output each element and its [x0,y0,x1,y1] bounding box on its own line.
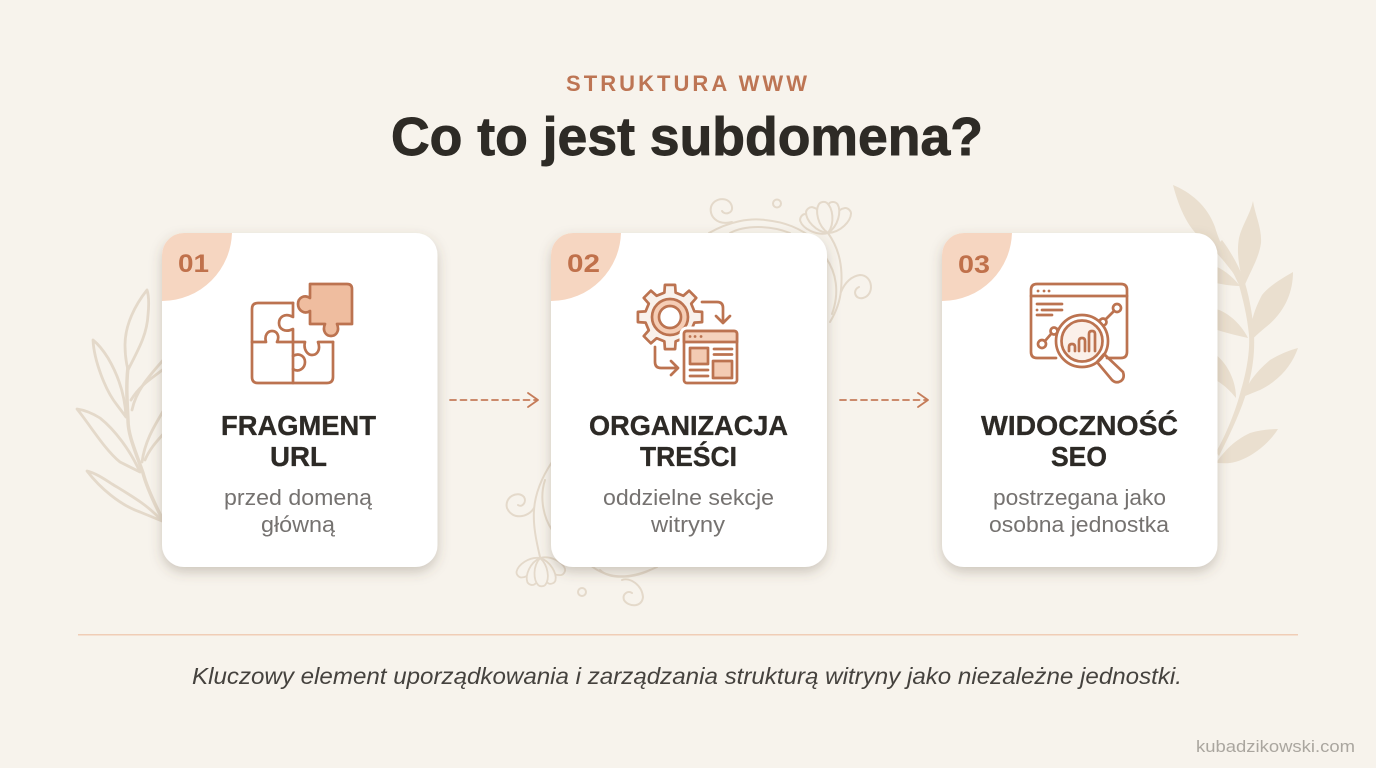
closing statement: Kluczowy element uporządkowania i zarządzania strukturą witryny jako niezależne jednostki. [192,663,1182,689]
card 2 description: oddzielne sekcje [603,485,774,510]
card 3 heading: SEO [1051,441,1107,472]
card 1 [156,232,444,578]
card 2 description [603,485,774,537]
decoration: swirl bottom left [507,462,657,605]
card 2 heading: ORGANIZACJA [589,410,788,441]
card 3 number badge [942,233,1012,301]
card 3 description [989,485,1170,537]
card 1 heading: FRAGMENT [221,410,376,441]
title: Co to jest subdomena? [391,107,983,167]
card 2 number badge [551,233,621,301]
card 2 description: witryny [650,512,725,537]
card 2 heading: TREŚCI [640,441,737,472]
card 2 heading [589,410,788,472]
card 3 [936,232,1224,578]
card 1 heading: URL [270,441,327,472]
card 2 number badge: 02 [567,250,600,278]
divider [78,634,1298,636]
card 1 description: główną [261,512,336,537]
card 2 [544,232,834,578]
icon: browser window with magnifier [1031,284,1127,382]
arrow 2 to 3 [840,393,928,407]
icon: gear and window [638,285,737,383]
decoration: filled right branch [1173,185,1298,463]
website credit: kubadzikowski.com [1196,737,1355,756]
decoration: outlined left branch [77,290,165,524]
card 3 description: osobna jednostka [989,512,1170,537]
card 3 heading [981,410,1178,472]
card 1 description: przed domeną [224,485,373,510]
card 3 heading: WIDOCZNOŚĆ [981,410,1178,441]
card 1 description [224,485,373,537]
arrow 1 to 2 [450,393,538,407]
card 3 number badge: 03 [958,251,990,279]
decoration: swirl top right [709,199,871,322]
card 3 description: postrzegana jako [993,485,1166,510]
eyebrow: STRUKTURA WWW [566,71,807,96]
icon: puzzle pieces [252,284,352,383]
card 1 heading [221,410,376,472]
card 1 number badge [162,233,232,301]
card 1 number badge: 01 [178,250,209,278]
